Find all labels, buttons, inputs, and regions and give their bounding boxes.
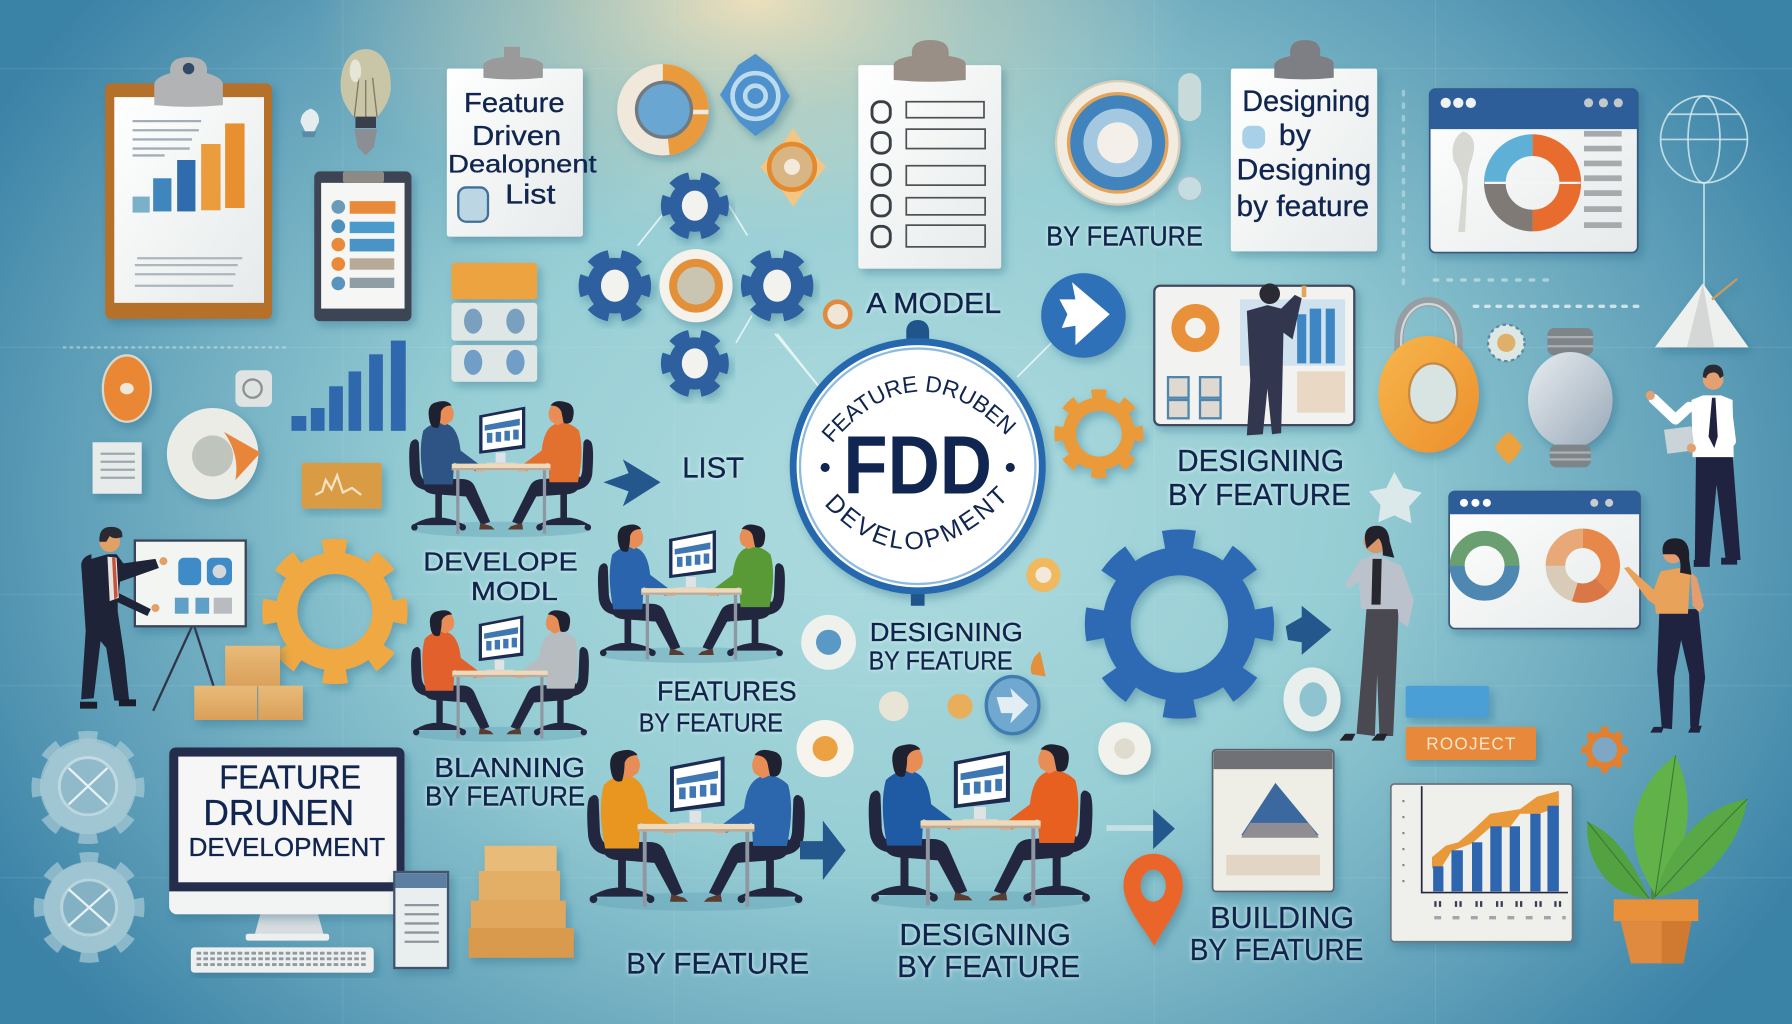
browser window: two donuts [1449,491,1640,629]
icon: orange gem [1495,432,1522,464]
team at desk: blue and green [598,525,785,663]
label: list: LIST [682,453,744,485]
icon: orange coin [103,355,151,422]
icon: orange sunburst button [760,128,826,207]
label: by feature: BY FEATURE [1046,221,1203,252]
clipboard heading text [1237,85,1371,223]
donut: orange segments [1555,538,1610,593]
label: planning by feature [425,752,585,812]
arrow [800,821,846,880]
clipboard heading text [448,87,597,209]
clipboard: designing by feature [1231,40,1377,251]
label: features by feature: BY FEATURE [639,707,783,737]
icon: small orange gear [1584,729,1625,770]
tablet checklist [314,171,411,321]
screen title text: DEVELOPMENT [189,832,385,862]
label: developer model: MODL [471,576,558,606]
cardboard boxes [194,646,303,720]
icon: small pin [301,109,319,137]
team at desk: navy and orange [869,744,1092,910]
donut chart [1485,145,1581,221]
label: designing by feature [897,917,1080,984]
gear: large blue [1096,541,1263,707]
clipboard: feature driven development list [447,47,597,237]
badge arc text: bottom: DEVELOPMENT [825,485,1004,550]
connector arrow [1106,809,1175,849]
blue button [1406,686,1489,718]
keyboard [191,947,374,973]
potted plant [1587,755,1747,963]
icon: orange ring dial [617,64,709,155]
gear: large gold [271,547,399,676]
arrow [603,459,661,506]
dashed connector [63,346,286,348]
clipboard: report with bar chart [105,57,272,319]
icon: pie disc [167,408,261,499]
label: designing by feature: BY FEATURE [869,646,1013,676]
orange button: project: ROOJECT [1426,734,1516,754]
orange tag [302,463,382,509]
label: developer model [423,546,578,606]
team at desk: orange and grey [411,610,589,742]
label: building by feature: BUILDING [1210,900,1354,935]
icon: small tile [235,370,272,407]
icon: light bulb [341,49,391,155]
label: building by feature [1190,900,1363,967]
label: planning by feature: BLANNING [434,752,585,783]
icon: white pyramid [1655,279,1749,347]
chart card: growth [1391,784,1573,942]
screen title text: FEATURE [219,760,361,797]
clipboard heading text: Dealopnent [448,151,597,179]
person: man with tablet [1646,365,1741,567]
clipboard heading text: by feature [1237,190,1369,223]
icon: white ring [1283,667,1341,731]
icon: white star [1369,472,1422,523]
label: designing by feature [869,617,1023,676]
label: designing by feature: DESIGNING [899,917,1071,952]
browser window: donut chart [1430,89,1638,253]
badge separator dots [821,463,1015,472]
clipboard: checklist [858,40,1001,269]
label: features by feature [639,676,797,737]
label: designing by feature: BY FEATURE [1168,477,1351,512]
label: building by feature: BY FEATURE [1190,932,1363,967]
team at desk: yellow and blue [587,750,805,911]
badge title: FDD [843,421,992,512]
badge arc text: top [827,392,1011,449]
whiteboard on tripod [135,541,246,711]
label: developer model: DEVELOPE [423,546,578,576]
person: woman standing [1339,526,1414,741]
presentation board with man [1154,283,1354,435]
document [394,872,448,968]
small capsule icons [1177,73,1202,201]
icon: wire globe on stalk [1661,96,1747,299]
label: a model: A MODEL [866,288,1001,320]
team presenter with board [80,527,246,711]
clipboard heading text: Driven [472,120,561,151]
central FDD badge: FEATURE DRUBEN [822,376,1016,442]
label: planning by feature: BY FEATURE [425,781,585,812]
label: designing by feature: DESIGNING [870,617,1023,647]
clipboard heading text: Designing [1242,85,1370,118]
person: woman pointing [1624,538,1705,733]
screen title text [189,760,385,862]
label: by feature: BY FEATURE [626,948,809,981]
faded gears [38,738,138,956]
monitor with title [169,747,405,941]
screen title text: DRUNEN [203,792,354,833]
donut: green and blue [1457,538,1512,593]
clipboard heading text: Designing [1237,153,1371,186]
feature network cluster [584,177,821,392]
label: features by feature: FEATURES [657,676,797,707]
dotted connectors [1403,91,1641,306]
label: designing by feature: DESIGNING [1177,443,1344,478]
padlock [1378,302,1479,453]
icon: round blue arrow [986,677,1039,734]
icon: document [93,442,142,494]
clipboard heading text: by [1279,119,1311,152]
white flower [1098,722,1151,775]
icon: small sun [1488,325,1525,361]
label: designing by feature: BY FEATURE [897,949,1080,984]
stacked cardboard boxes [469,846,574,958]
label: designing by feature [1168,443,1351,512]
map pin [1123,854,1183,946]
icon: glass globe bulb [1528,328,1613,467]
clipboard heading text: Feature [464,87,565,118]
clipboard heading text: List [505,178,556,209]
central FDD badge [776,320,1054,606]
bar chart: blue growth [291,341,406,431]
arrow [1286,606,1331,655]
small flower icons [797,558,1061,777]
icon: small orange flower [825,302,850,327]
icon: blue concentric badge [720,54,790,136]
card: pyramid panel [1213,750,1334,891]
man presenting [80,527,167,709]
gear: orange [1060,395,1138,473]
icon: target disc [1056,81,1179,205]
stacked option buttons [451,263,537,382]
blue play button [1041,273,1126,358]
man at board [1247,283,1306,435]
team at desk: blue and orange [409,401,593,537]
orange button: project [1406,727,1536,760]
